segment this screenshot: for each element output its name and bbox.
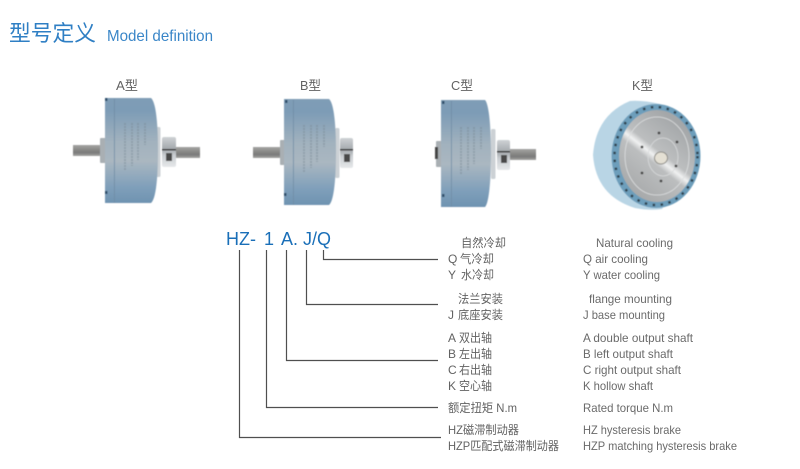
shaft options: A double output shaft	[583, 331, 694, 345]
product: B type brake	[253, 99, 353, 205]
label: B type: B型	[300, 78, 321, 93]
shaft options: 双出轴	[459, 330, 492, 345]
product: K type brake	[593, 101, 700, 210]
label: K type: K型	[632, 78, 653, 93]
leader: series	[240, 250, 441, 438]
cooling options	[448, 235, 506, 282]
rated torque: Rated torque N.m	[583, 401, 673, 415]
shaft options: B	[448, 347, 456, 361]
title	[9, 21, 213, 46]
cooling options: Natural cooling	[596, 236, 673, 250]
English definitions	[583, 236, 737, 453]
mounting options	[448, 291, 503, 322]
title: Chinese: 型号定义	[9, 21, 96, 46]
model code: HZ-1A.J/Q: J/Q	[303, 229, 331, 249]
shaft options: K	[448, 379, 456, 393]
cooling options: Q	[448, 252, 457, 266]
label: A type: A型	[116, 78, 138, 93]
model code: HZ-1A.J/Q: HZ-	[226, 229, 256, 249]
leader: mounting	[306, 250, 438, 304]
leader lines	[240, 250, 441, 438]
title: English: Model definition	[107, 28, 213, 45]
mounting options: 底座安装	[458, 307, 503, 322]
shaft options: B left output shaft	[583, 347, 674, 361]
cooling options: 自然冷却	[461, 235, 506, 250]
cooling options: Q air cooling	[583, 252, 648, 266]
model code: HZ-1A.J/Q: A.	[281, 229, 298, 249]
series names	[583, 423, 737, 453]
series names: HZP matching hysteresis brake	[583, 439, 737, 453]
series names: HZ hysteresis brake	[583, 423, 681, 437]
rated torque: 额定扭矩 N.m	[448, 400, 517, 415]
product: C type brake	[435, 100, 536, 207]
model code: HZ-1A.J/Q	[226, 229, 331, 249]
mounting options: J base mounting	[583, 308, 665, 322]
series names: HZP匹配式磁滞制动器	[448, 438, 559, 453]
label: C type: C型	[451, 78, 473, 93]
series names: HZ磁滞制动器	[448, 422, 519, 437]
leader: rated torque	[266, 250, 438, 408]
shaft options: K hollow shaft	[583, 379, 654, 393]
model code: HZ-1A.J/Q: 1	[264, 229, 274, 249]
cooling options: Y	[448, 268, 456, 282]
shaft options: C	[448, 363, 457, 377]
shaft options: A	[448, 331, 456, 345]
mounting options: flange mounting	[589, 292, 672, 306]
cooling options: 水冷却	[461, 268, 494, 282]
leader: shaft type	[286, 250, 438, 360]
product: A type brake	[73, 98, 200, 203]
mounting options: 法兰安装	[458, 291, 503, 306]
series names	[448, 422, 559, 453]
shaft options: C right output shaft	[583, 363, 682, 377]
shaft options	[448, 330, 492, 393]
shaft options: 右出轴	[459, 362, 492, 377]
shaft options: 左出轴	[459, 346, 492, 361]
mounting options	[583, 292, 672, 322]
leader: cooling	[324, 250, 438, 260]
mounting options: J	[448, 308, 454, 322]
cooling options: Y water cooling	[583, 268, 660, 282]
cooling options: 气冷却	[460, 251, 494, 266]
shaft options	[583, 331, 694, 393]
Chinese definitions	[448, 235, 559, 453]
cooling options	[583, 236, 673, 282]
shaft options: 空心轴	[459, 378, 492, 393]
